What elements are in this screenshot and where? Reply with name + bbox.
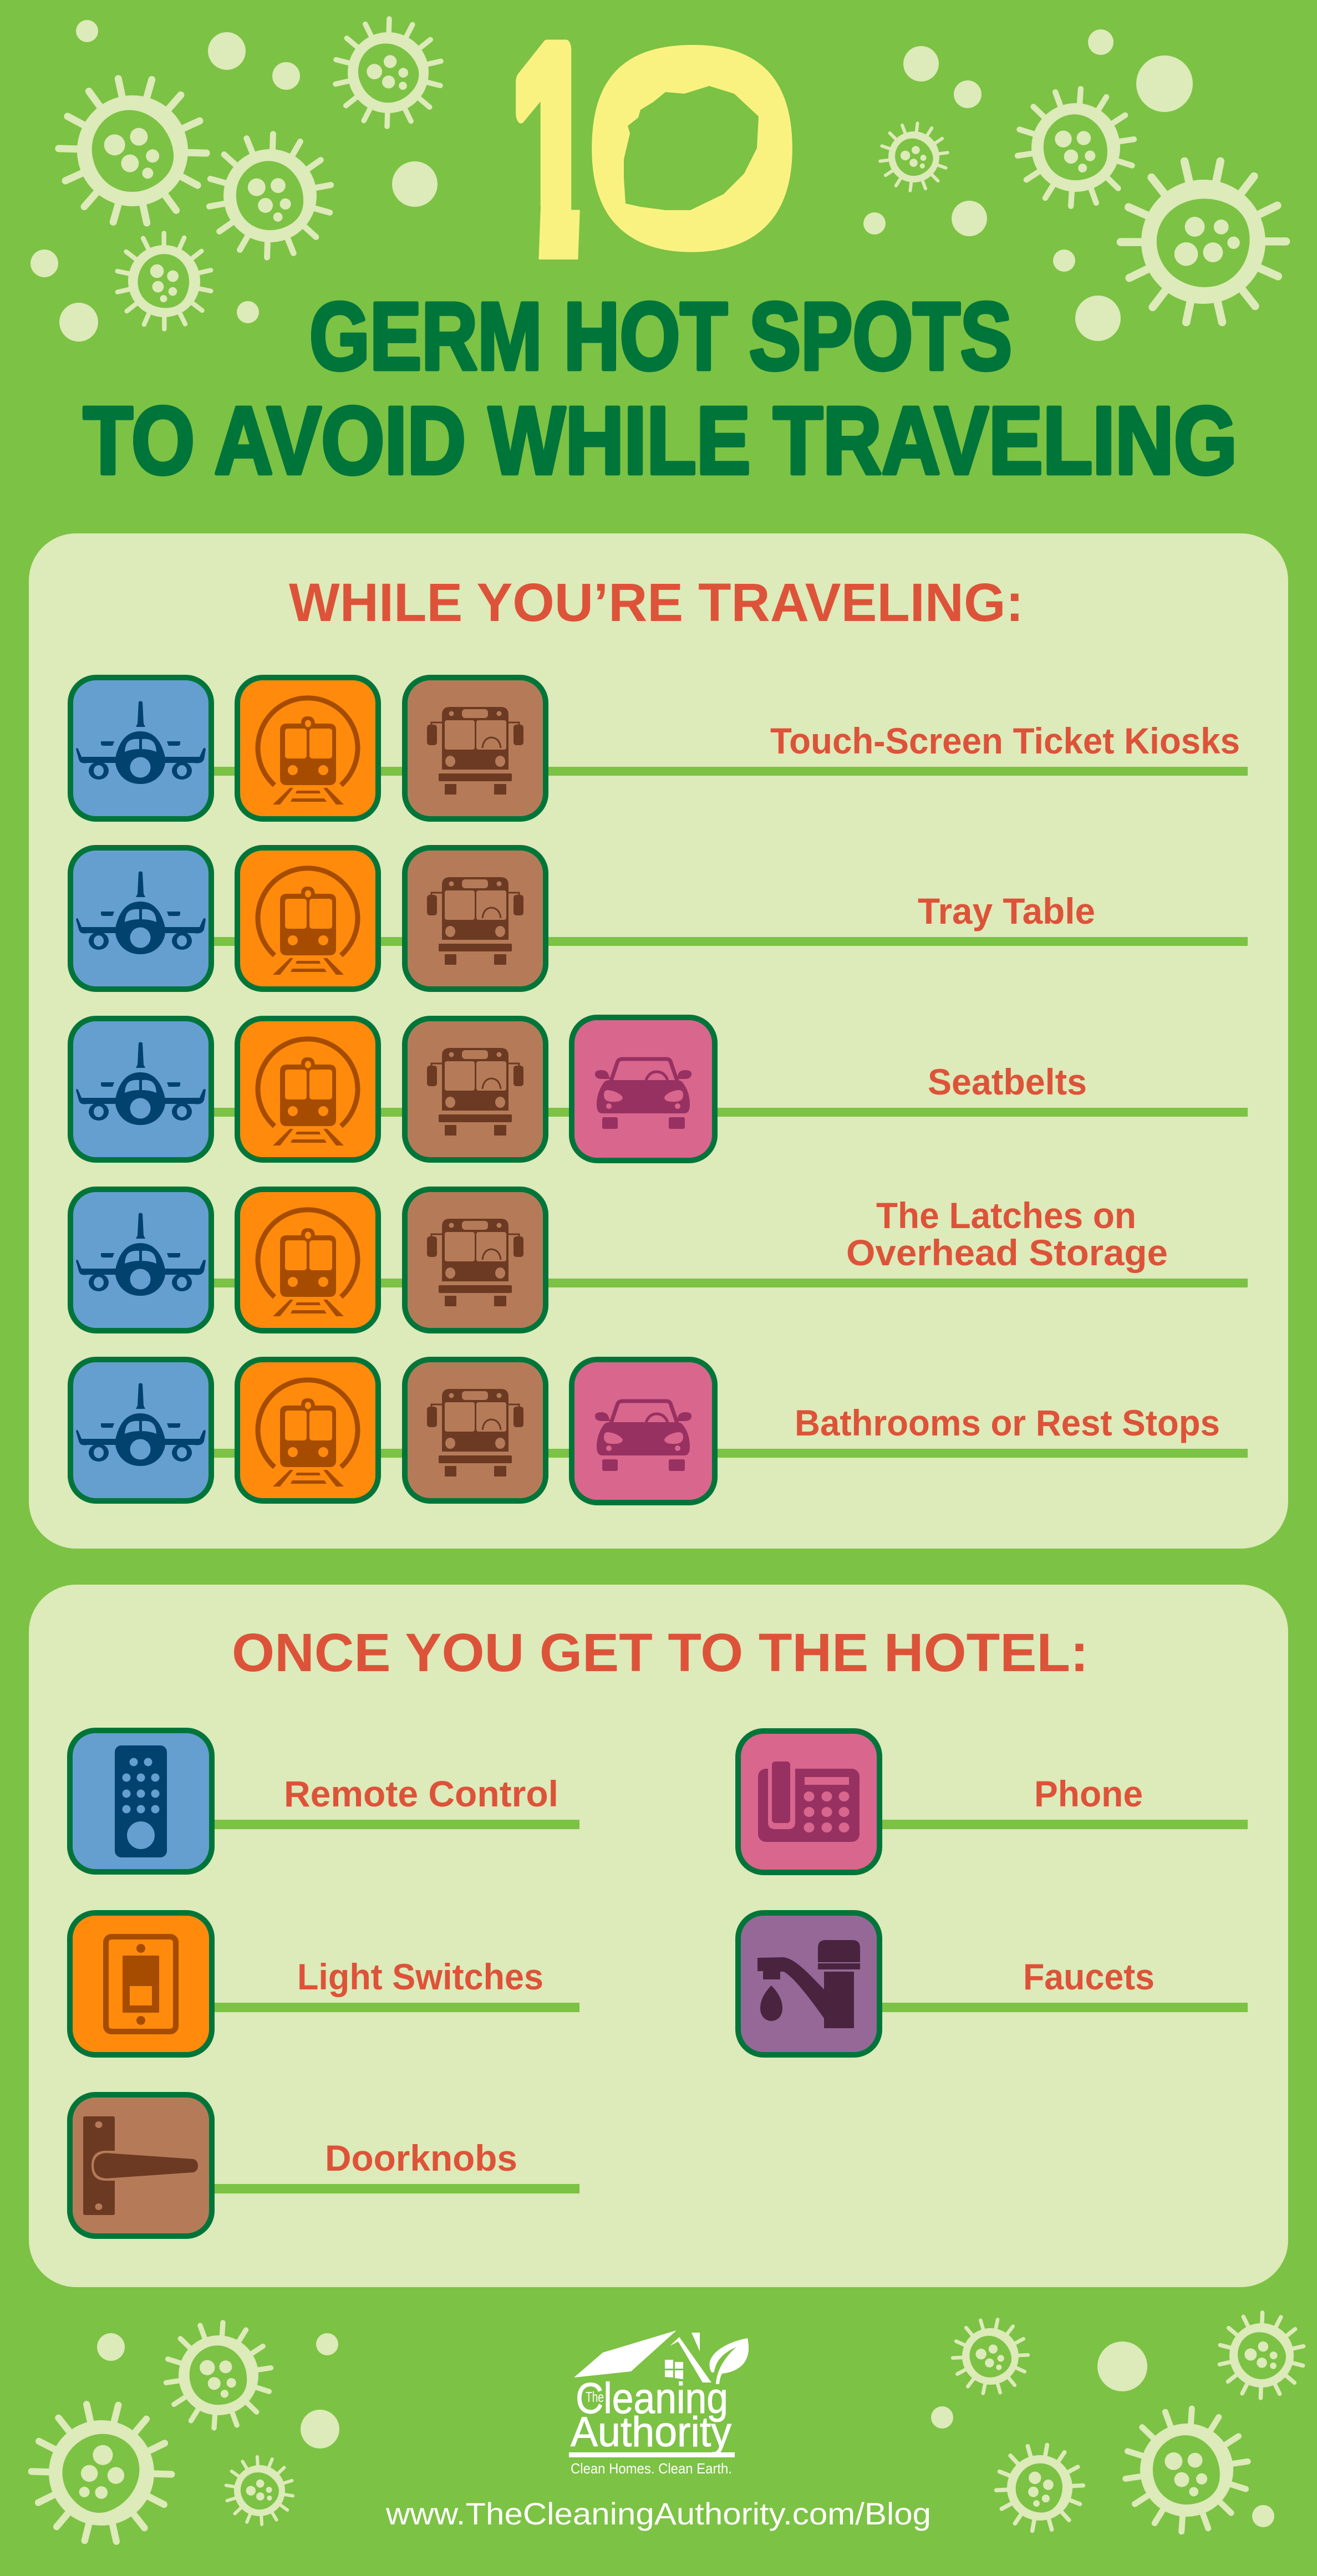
title numeral: 10: 0 — [591, 1, 794, 296]
row: bathrooms or rest stops: Bathrooms or Rest Stops — [795, 1402, 1220, 1443]
row: tray table — [70, 848, 1248, 989]
decorative germs: top right — [863, 29, 1315, 354]
title numeral: 10 — [502, 0, 794, 312]
item: remote control: Remote Control — [284, 1773, 558, 1814]
logo: The Cleaning Authority — [569, 2330, 749, 2477]
row: touch-screen ticket kiosks: Touch-Screen Ticket Kiosks — [770, 720, 1240, 761]
decorative germs: bottom right — [931, 2301, 1316, 2549]
item: faucets: Faucets — [1023, 1956, 1155, 1997]
item: light switches — [70, 1913, 579, 2055]
logo wordmark: Authority: Authority — [571, 2409, 731, 2456]
item: faucets — [738, 1913, 1248, 2055]
row: seatbelts: Seatbelts — [928, 1061, 1087, 1102]
row: latches on overhead storage — [70, 1189, 1248, 1331]
row: touch-screen ticket kiosks — [70, 678, 1248, 819]
row: latches on overhead storage: Overhead Storage — [846, 1232, 1168, 1273]
decorative germs: top left — [30, 4, 457, 346]
row: tray table: Tray Table — [918, 890, 1095, 931]
logo wordmark: The: The — [586, 2389, 604, 2405]
item: light switches: Light Switches — [297, 1956, 543, 1997]
logo tagline: Clean Homes. Clean Earth. — [571, 2460, 732, 2477]
title line 1: GERM HOT SPOTS — [309, 282, 1012, 390]
row: bathrooms or rest stops — [70, 1360, 1248, 1503]
row: seatbelts — [70, 1017, 1248, 1160]
logo wordmark: Cleaning: Cleaning — [576, 2374, 728, 2422]
item: phone: Phone — [1034, 1773, 1143, 1814]
icon: house roof and leaf — [574, 2330, 749, 2384]
logo underline — [569, 2452, 735, 2457]
website url: www.TheCleaningAuthority.com/Blog — [385, 2496, 931, 2531]
heading: once you get to the hotel: ONCE YOU GET TO THE HOTEL: — [232, 1622, 1089, 1683]
decorative germs: bottom left — [12, 2314, 339, 2562]
heading: while you're traveling: WHILE YOU’RE TRAVELING: — [289, 572, 1024, 633]
panel: once you get to the hotel — [29, 1585, 1288, 2287]
item: doorknobs: Doorknobs — [325, 2137, 517, 2178]
item: remote control — [70, 1730, 579, 1872]
row: latches on overhead storage: The Latches on — [876, 1195, 1136, 1236]
item: doorknobs — [70, 2095, 579, 2236]
panel: while you're traveling — [29, 533, 1288, 1549]
item: phone — [738, 1731, 1248, 1872]
